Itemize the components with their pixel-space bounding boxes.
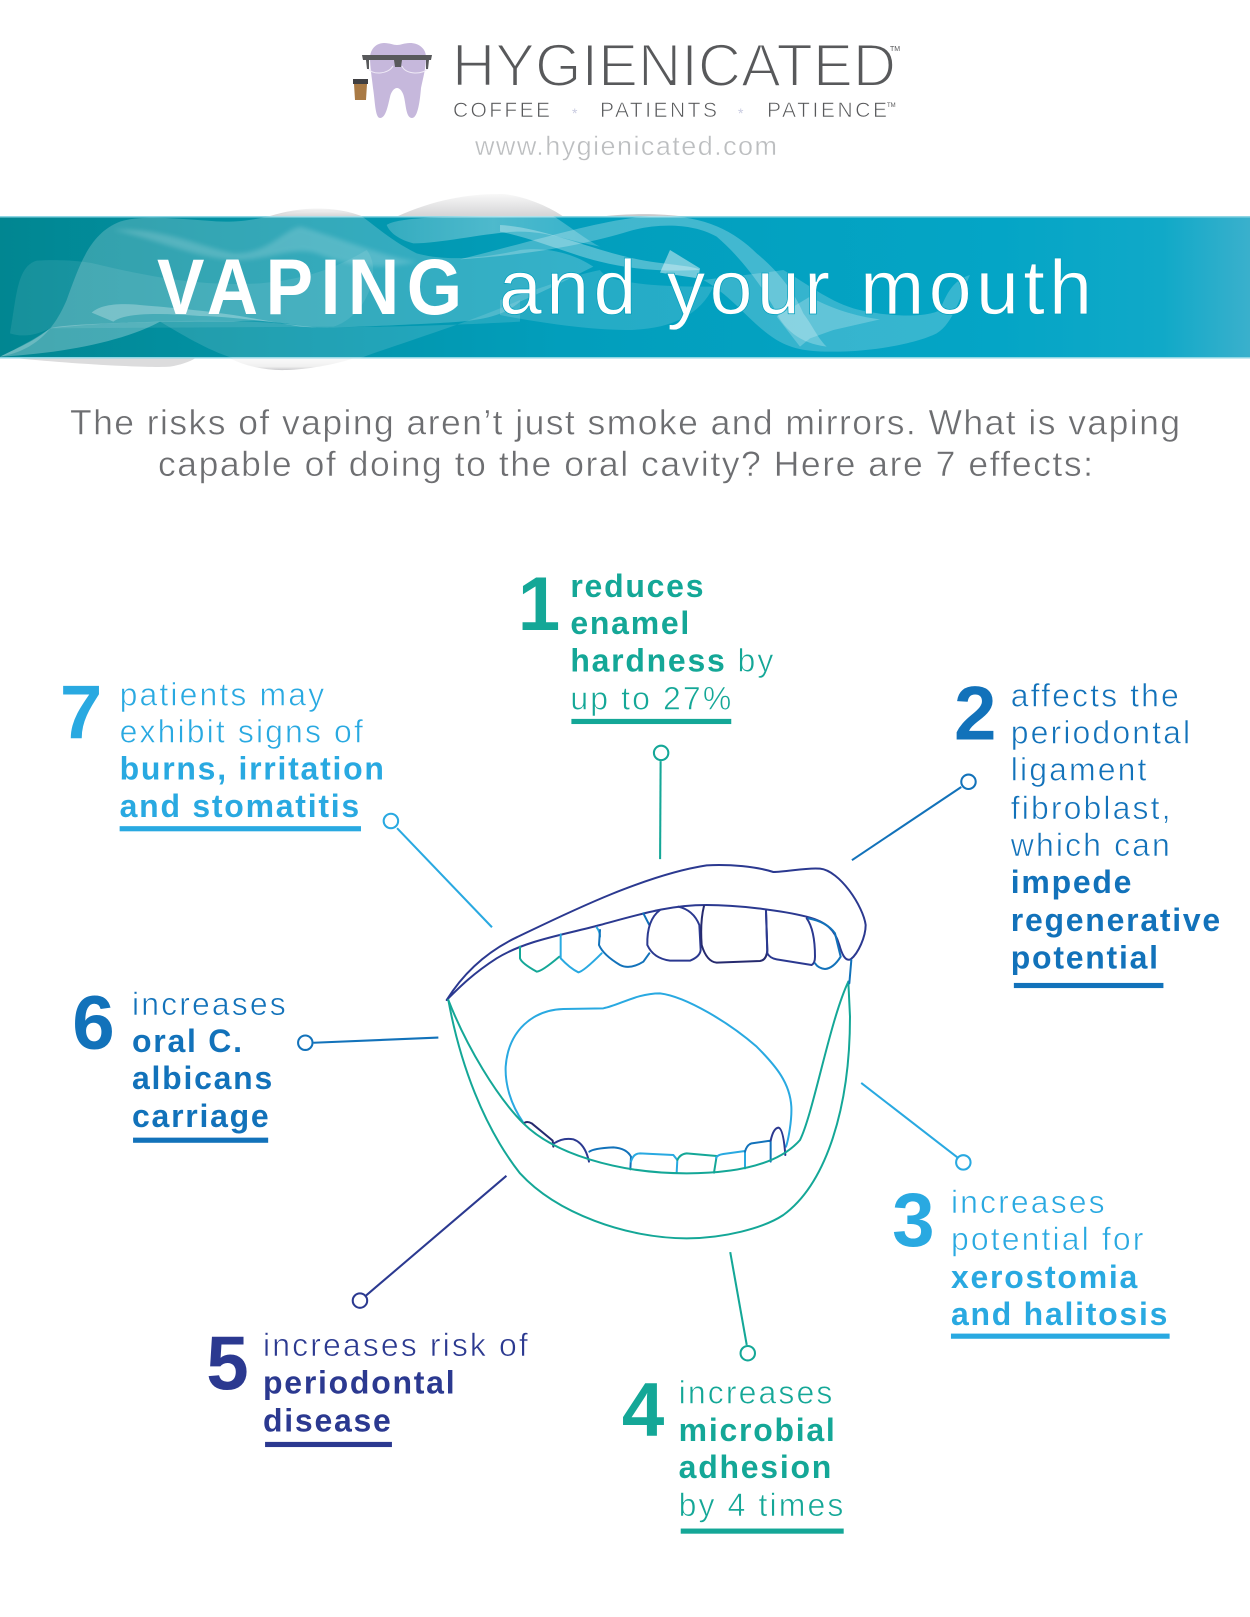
effect 7 (60, 670, 386, 831)
effect 2 text: which can (1010, 827, 1172, 863)
number 6: 6 (72, 981, 115, 1066)
effect 4 text: by 4 times (679, 1487, 846, 1523)
number 2: 2 (954, 672, 996, 757)
effect 1 text: reduces (570, 568, 705, 604)
tagline: COFFEE (453, 99, 550, 122)
effect 6 text: albicans (132, 1060, 274, 1096)
tagline (453, 99, 896, 122)
smoke (0, 211, 970, 358)
effect 7 text: exhibit signs of (120, 714, 365, 750)
smoke shadows outside banner (18, 194, 683, 370)
effect 2 text: regenerative (1011, 902, 1222, 938)
connector 6 (298, 1036, 438, 1050)
effect 6 text: increases (132, 986, 288, 1022)
brand name: HYGIENICATED (452, 32, 896, 99)
effect 4 (622, 1368, 846, 1534)
illustration: open mouth (447, 865, 866, 1238)
connector 5 (353, 1176, 506, 1308)
effect 5 text: disease (263, 1402, 393, 1438)
connector 1 (654, 746, 668, 859)
effect 1 text: enamel (570, 605, 691, 641)
tagline: * (572, 105, 578, 121)
banner (0, 194, 1250, 370)
tagline: * (738, 105, 744, 121)
icon: tooth mascot (353, 43, 432, 118)
effect 3 text: xerostomia (951, 1259, 1139, 1295)
number 7: 7 (60, 670, 102, 755)
effect 3 (892, 1178, 1170, 1339)
effect 3 text: increases (951, 1184, 1107, 1220)
effect 4 text: microbial (679, 1412, 837, 1448)
title continuation: and your mouth (499, 245, 1092, 331)
title: VAPING (157, 243, 462, 331)
effect 2 text: periodontal (1011, 715, 1192, 751)
connector 3 (861, 1083, 971, 1170)
effect 5 text: increases risk of (263, 1327, 530, 1363)
effect 7 text: burns, irritation (120, 751, 386, 787)
effect 2 text: ligament (1011, 752, 1149, 788)
effect 6 text: carriage (132, 1098, 270, 1134)
banner background (0, 217, 1250, 358)
effect 5 text (263, 1327, 530, 1447)
tagline: TM (887, 103, 896, 109)
effect 1 text (570, 568, 776, 724)
tongue (506, 993, 791, 1147)
effect 7 text: patients may (120, 676, 326, 712)
effect 3 text (951, 1184, 1170, 1339)
connector 7 (384, 814, 492, 927)
upper lip (447, 865, 866, 1000)
intro text (70, 402, 1180, 484)
effect 2 text (1010, 677, 1222, 988)
intro text: capable of doing to the oral cavity? Here are 7 effects: (158, 444, 1093, 484)
upper teeth (520, 906, 841, 972)
effect 5 text: periodontal (263, 1364, 456, 1400)
effect 7 text: and stomatitis (120, 788, 361, 824)
effect 2 text: impede (1011, 864, 1133, 900)
effect 5 (206, 1321, 530, 1447)
lower lip (448, 960, 851, 1238)
effect 1 text: hardness by (570, 642, 776, 678)
number 3: 3 (892, 1178, 935, 1263)
effect 3 text: potential for (951, 1221, 1145, 1257)
tagline: PATIENTS (600, 99, 717, 122)
lower teeth (524, 1122, 785, 1173)
effect 2 text: fibroblast, (1011, 790, 1173, 826)
effect 7 text (120, 676, 386, 831)
effect 4 text: adhesion (679, 1449, 833, 1485)
effect 2 (954, 672, 1222, 988)
tagline: PATIENCE (767, 99, 887, 122)
number 4: 4 (622, 1368, 665, 1453)
number 5: 5 (206, 1321, 249, 1406)
connector 4 (730, 1252, 755, 1360)
effect 2 text: potential (1011, 939, 1160, 975)
effect 6 (72, 981, 288, 1143)
effect 4 text (679, 1375, 846, 1534)
number 1: 1 (518, 562, 560, 647)
effect 1 (518, 562, 776, 724)
logo (353, 32, 900, 161)
trademark: TM (890, 46, 900, 53)
effect 4 text: increases (679, 1375, 835, 1411)
effect 2 text: affects the (1011, 677, 1181, 713)
effect 3 text: and halitosis (951, 1296, 1169, 1332)
website: www.hygienicated.com (474, 131, 777, 161)
effect 6 text: oral C. (132, 1023, 244, 1059)
effect 1 text: up to 27% (570, 681, 733, 717)
connector 2 (852, 775, 976, 860)
intro text: The risks of vaping aren’t just smoke and mirrors. What is vaping (70, 402, 1180, 442)
effect 6 text (132, 986, 288, 1143)
